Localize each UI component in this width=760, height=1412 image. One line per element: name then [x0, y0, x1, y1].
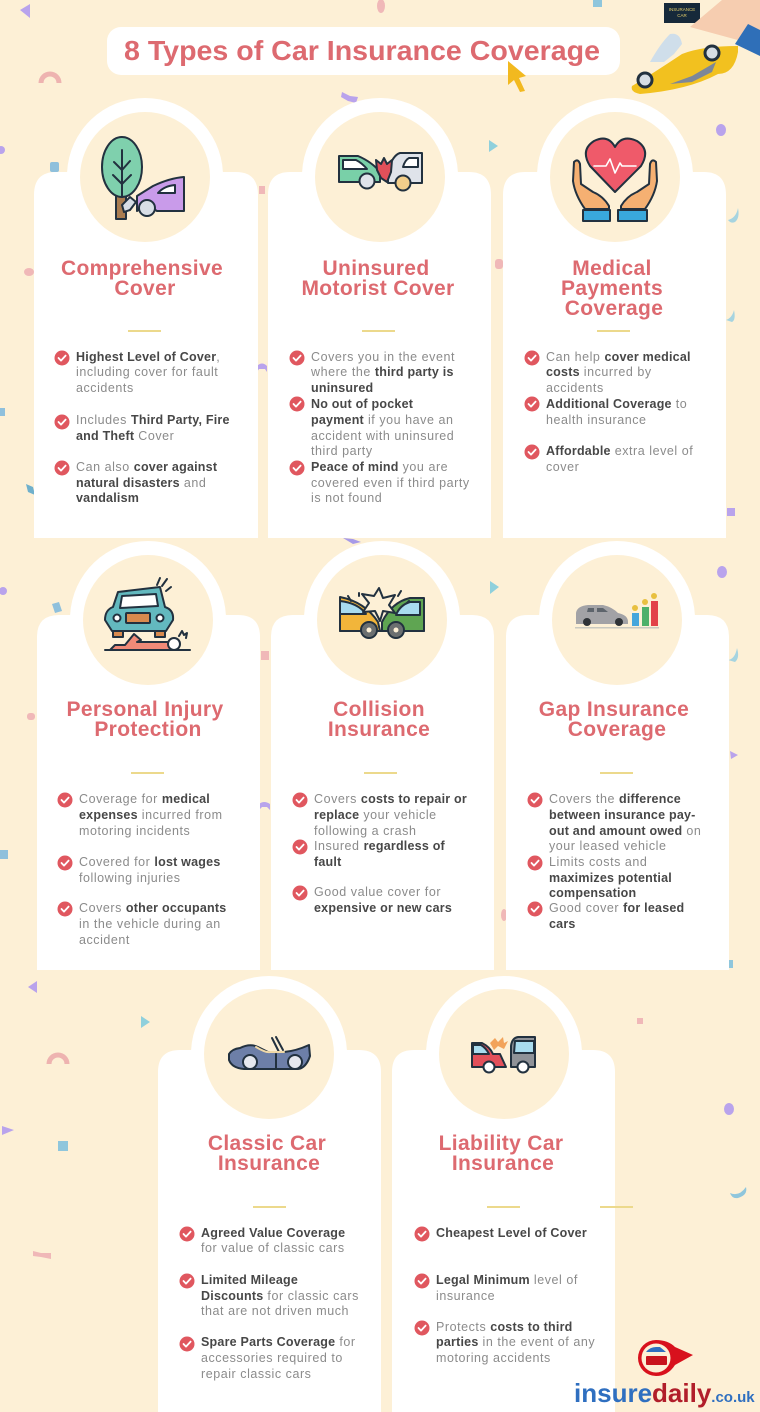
- bullet list: Cheapest Level of Cover: [436, 1226, 587, 1240]
- bullet list: accidents: [546, 381, 604, 395]
- heading: Liability Car: [439, 1132, 563, 1155]
- icon circle: [317, 555, 447, 685]
- bullet list: Highest Level of Cover,: [76, 350, 220, 364]
- bullet list: following a crash: [314, 824, 416, 838]
- bullet list: Limited Mileage: [201, 1273, 298, 1287]
- card background: [158, 976, 381, 1412]
- bullet list: replace your vehicle: [314, 808, 437, 822]
- bullet list: accident: [79, 933, 130, 947]
- title banner: 8 Types of Car Insurance Coverage: [124, 35, 600, 66]
- bullet list: covered even if third party: [311, 476, 470, 490]
- bullet list: Can help cover medical: [546, 350, 691, 364]
- heading: Insurance: [452, 1152, 554, 1175]
- bullet list: and Theft Cover: [76, 429, 174, 443]
- icon circle: [552, 555, 682, 685]
- bullet list: natural disasters and: [76, 476, 206, 490]
- bullet list: where the third party is: [310, 365, 454, 379]
- bullet list: that are not driven much: [201, 1304, 349, 1318]
- heading: Payments: [561, 277, 663, 300]
- heading: Coverage: [565, 297, 663, 320]
- bullet list: Good value cover for: [314, 885, 441, 899]
- icon: insurance sign, hand and overturned car: CAR: [677, 13, 687, 18]
- heading: Medical: [572, 257, 652, 280]
- icon: cursor: [508, 61, 526, 92]
- panel: Gap Insurance Coverage: [506, 541, 729, 970]
- bullet list: in the vehicle during an: [79, 917, 221, 931]
- heading: Insurance: [328, 718, 430, 741]
- bullet list: [58, 792, 226, 947]
- bullet list: between insurance pay-: [549, 808, 696, 822]
- bullet list: Legal Minimum level of: [436, 1273, 578, 1287]
- logo: insuredaily.co.uk: [574, 1340, 755, 1408]
- icon: car hitting tree: [102, 137, 184, 219]
- heading: Classic Car: [208, 1132, 326, 1155]
- bullet list: [290, 350, 470, 505]
- bullet list: Covered for lost wages: [79, 855, 221, 869]
- bullet list: expensive or new cars: [314, 901, 452, 915]
- bullet list: Affordable extra level of: [546, 444, 693, 458]
- bullet list: cover: [546, 460, 579, 474]
- heading: Motorist Cover: [301, 277, 455, 300]
- bullet list: Covers other occupants: [79, 901, 226, 915]
- card background: [503, 98, 726, 538]
- icon circle: [204, 989, 334, 1119]
- bullet list: repair classic cars: [201, 1367, 311, 1381]
- bullet list: Good cover for leased: [549, 901, 684, 915]
- card background: [37, 541, 260, 970]
- bullet list: for value of classic cars: [201, 1241, 345, 1255]
- bullet list: Coverage for medical: [79, 792, 210, 806]
- panel: Classic Car Insurance: [158, 976, 381, 1412]
- bullet list: your leased vehicle: [549, 839, 666, 853]
- heading: Personal Injury: [67, 698, 223, 721]
- icon: collision: [340, 588, 424, 638]
- card background: [271, 541, 494, 970]
- bullet list: fault: [314, 855, 342, 869]
- bullet list: Discounts for classic cars: [201, 1289, 359, 1303]
- bullet list: No out of pocket: [311, 397, 414, 411]
- heading: Comprehensive: [61, 257, 223, 280]
- icon: car and truck crash: [472, 1037, 535, 1072]
- bullet list: Can also cover against: [76, 460, 218, 474]
- bullet list: out and amount owed on: [549, 824, 701, 838]
- heading: Uninsured: [322, 257, 430, 280]
- bullet list: Insured regardless of: [314, 839, 446, 853]
- icon circle: [439, 989, 569, 1119]
- bullet list: [54, 350, 230, 505]
- logo: insuredaily.co.uk: insuredaily.co.uk: [574, 1378, 755, 1408]
- bullet list: accident with uninsured: [311, 429, 454, 443]
- bullet list: Covers costs to repair or: [314, 792, 467, 806]
- panel: Comprehensive Cover: [34, 98, 258, 538]
- bullet list: [414, 1226, 595, 1365]
- icon: insurance sign, hand and overturned car: INSURANCE: [669, 7, 695, 12]
- bullet list: Includes Third Party, Fire: [76, 413, 230, 427]
- bullet list: Limits costs and: [549, 855, 647, 869]
- bullet list: motoring incidents: [79, 824, 190, 838]
- bullet list: uninsured: [311, 381, 373, 395]
- bullet list: is not found: [311, 491, 382, 505]
- icon: heart in hands: [573, 139, 657, 221]
- icon circle: [315, 112, 445, 242]
- panel: Collision Insurance: [271, 541, 494, 970]
- bullet list: [292, 792, 467, 915]
- icon circle: [550, 112, 680, 242]
- bullet list: Spare Parts Coverage for: [201, 1335, 356, 1349]
- heading: Coverage: [568, 718, 666, 741]
- icon: classic roadster: [229, 1037, 310, 1069]
- panel: Uninsured Motorist Cover: [268, 98, 491, 538]
- card background: [392, 976, 615, 1412]
- bullet list: cars: [549, 917, 576, 931]
- title banner: [107, 27, 620, 75]
- bullet list: Covers the difference: [549, 792, 681, 806]
- bullet list: maximizes potential: [549, 871, 672, 885]
- heading: Collision: [333, 698, 425, 721]
- bullet list: health insurance: [546, 413, 647, 427]
- bullet list: third party: [311, 444, 373, 458]
- bullet list: Peace of mind you are: [311, 460, 448, 474]
- heading: Protection: [94, 718, 202, 741]
- bullet list: costs incurred by: [546, 365, 652, 379]
- icon circle: [80, 112, 210, 242]
- icon circle: [83, 555, 213, 685]
- heading: Insurance: [218, 1152, 320, 1175]
- bullet list: [528, 792, 701, 931]
- icon: two cars head-on: [339, 153, 422, 190]
- panel: Liability Car Insurance: [392, 976, 615, 1412]
- card background: [268, 98, 491, 538]
- bullet list: vandalism: [76, 491, 139, 505]
- bullet list: compensation: [549, 886, 636, 900]
- bullet list: [524, 350, 693, 474]
- icon: grey car and bars: [575, 593, 659, 628]
- panel: Personal Injury Protection: [37, 541, 260, 970]
- bullet list: motoring accidents: [436, 1351, 551, 1365]
- icon: car over injured person: [105, 578, 190, 650]
- card background: [34, 98, 258, 538]
- bullet list: Additional Coverage to: [546, 397, 687, 411]
- bullet list: accessories required to: [201, 1351, 343, 1365]
- bullet list: following injuries: [79, 871, 181, 885]
- bullet list: parties in the event of any: [436, 1335, 595, 1349]
- panel: Medical Payments Coverage: [503, 98, 726, 538]
- card background: [506, 541, 729, 970]
- bullet list: expenses incurred from: [79, 808, 223, 822]
- bullet list: insurance: [436, 1289, 495, 1303]
- bullet list: Covers you in the event: [311, 350, 455, 364]
- bullet list: Protects costs to third: [436, 1320, 573, 1334]
- icon: insurance sign, hand and overturned car: [632, 0, 760, 94]
- bullet list: including cover for fault: [76, 365, 218, 379]
- heading: Cover: [114, 277, 176, 300]
- bullet list: accidents: [76, 381, 134, 395]
- heading: Gap Insurance: [539, 698, 689, 721]
- bullet list: Agreed Value Coverage: [201, 1226, 345, 1240]
- bullet list: payment if you have an: [311, 413, 454, 427]
- bullet list: [180, 1226, 359, 1381]
